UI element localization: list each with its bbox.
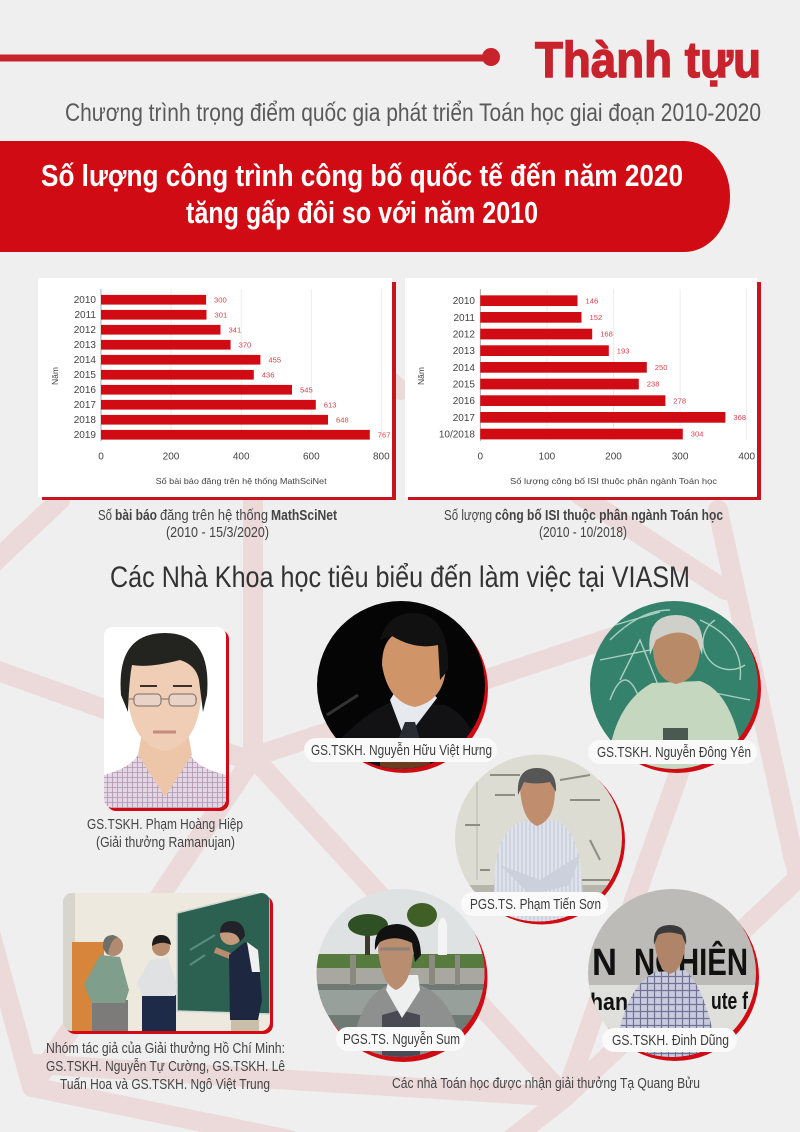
value labels: 301 [214,310,227,320]
year labels: 2013 [74,340,96,351]
value labels [214,296,390,440]
name label: GS.TSKH. Nguyễn Đông Yên [597,744,751,761]
y axis title: Năm [50,367,60,385]
year labels [439,296,475,440]
value labels: 368 [733,413,746,422]
circle portrait: Đinh Dũng: N [592,942,617,984]
name label [304,738,497,762]
caption: MathSciNet chart: Số [98,507,112,524]
year labels: 2010 [74,295,96,306]
value labels: 613 [324,400,336,410]
title: Thành tựu [535,32,761,88]
year labels: 2016 [74,385,96,396]
x axis ticks: 400 [738,452,755,462]
caption: MathSciNet chart: đăng trên hệ thống [160,507,268,524]
caption: ISI chart: (2010 - 10/2018) [539,524,627,541]
x axis ticks [478,452,755,462]
caption: Tạ Quang Bửu prize: Các nhà Toán học được nhận giải thưởng Tạ Quang Bửu [392,1075,700,1092]
value labels: 455 [268,356,281,364]
year labels: 2017 [74,400,96,411]
value labels: 168 [600,330,613,339]
value labels [586,296,746,439]
year labels: 2018 [74,415,96,426]
value labels: 341 [228,326,241,334]
year labels: 2014 [453,363,475,374]
year labels: 10/2018 [439,430,475,440]
header line with dot [0,48,500,66]
caption: Phạm Hoàng Hiệp: (Giải thưởng Ramanujan) [96,834,235,851]
value labels: 146 [586,296,598,305]
value labels: 278 [673,396,686,405]
caption: group photo: Nhóm tác giả của Giải thưởng Hồ Chí Minh: [46,1040,285,1057]
bars [101,295,370,440]
value labels: 304 [691,430,703,439]
circle portrait: Phạm Tiến Sơn [455,754,625,925]
red banner [0,141,730,252]
value labels: 250 [655,363,667,372]
x axis ticks: 0 [478,452,484,462]
value labels: 238 [647,380,659,389]
circle portrait: Nguyễn Hữu Việt Hưng [304,601,497,775]
year labels: 2011 [74,310,96,321]
name label [588,740,757,764]
portrait card: Phạm Hoàng Hiệp [104,627,229,811]
caption: ISI chart: công bố ISI thuộc phân ngành Toán học [495,507,723,524]
x axis ticks: 800 [373,452,390,462]
x axis title: Số lượng công bố ISI thuộc phân ngành Toán học [510,476,718,486]
banner headline line 2: tăng gấp đôi so với năm 2010 [186,195,538,230]
year labels: 2011 [453,313,475,324]
banner headline line 1: Số lượng công trình công bố quốc tế đến năm 2020 [41,158,683,193]
year labels: 2010 [453,296,475,307]
name label: GS.TSKH. Đinh Dũng [612,1032,729,1049]
bars [480,295,725,439]
caption: Phạm Hoàng Hiệp: GS.TSKH. Phạm Hoàng Hiệp [87,816,243,833]
caption: Phạm Hoàng Hiệp [87,816,243,851]
panel: MathSciNet bar chart [38,278,396,500]
name label: GS.TSKH. Nguyễn Hữu Việt Hưng [311,742,492,759]
value labels: 152 [590,313,602,322]
x axis ticks: 300 [672,452,689,462]
circle portrait: Nguyễn Sum [315,889,488,1062]
year labels: 2015 [453,380,475,390]
caption: group photo: GS.TSKH. Nguyễn Tự Cường, GS.TSKH. Lê [46,1058,285,1075]
caption: group photo [46,1040,285,1093]
caption: ISI chart: Số lượng [444,507,492,524]
year labels: 2013 [453,346,475,357]
value labels: 648 [336,416,349,424]
name label: PGS.TS. Phạm Tiến Sơn [470,896,601,913]
circle portrait: Đinh Dũng: ute f [711,988,749,1015]
y axis title: Năm [416,367,426,385]
year labels [74,295,96,441]
circle portrait: Đinh Dũng [588,889,759,1061]
caption: MathSciNet chart: (2010 - 15/3/2020) [166,524,269,541]
year labels: 2014 [74,355,96,366]
value labels: 193 [617,346,629,355]
year labels: 2017 [453,413,475,424]
circle portrait: Đinh Dũng: NGHIÊN [634,940,748,984]
group photo: Hồ Chí Minh prize authors [63,890,273,1034]
circle portrait: Đinh Dũng: han [590,989,628,1016]
value labels: 300 [214,296,227,304]
value labels: 545 [300,386,313,394]
circle portrait: Nguyễn Đông Yên [588,601,761,773]
x axis ticks: 600 [303,452,320,462]
caption: group photo: Tuấn Hoa và GS.TSKH. Ngô Việt Trung [60,1076,270,1093]
caption: MathSciNet chart [98,507,337,541]
x axis ticks: 400 [233,452,250,462]
section heading: Các Nhà Khoa học tiêu biểu đến làm việc tại VIASM [110,561,690,594]
name label [602,1028,737,1052]
panel: ISI bar chart [405,278,761,500]
x axis ticks [98,452,390,462]
name label [336,1027,465,1051]
name label: PGS.TS. Nguyễn Sum [343,1031,460,1048]
x axis ticks: 0 [98,452,104,462]
caption: MathSciNet chart: MathSciNet [271,507,337,524]
x axis title: Số bài báo đăng trên hệ thống MathSciNet [156,476,327,486]
x axis ticks: 200 [163,452,180,462]
x axis ticks: 100 [539,452,556,462]
value labels: 370 [239,340,251,350]
year labels: 2016 [453,396,475,407]
value labels: 767 [378,430,390,440]
caption: MathSciNet chart: bài báo [115,507,157,524]
x axis ticks: 200 [605,452,622,462]
name label [461,892,608,916]
caption: ISI chart [444,507,723,541]
value labels: 436 [262,370,274,380]
year labels: 2012 [453,330,475,340]
year labels: 2015 [74,370,96,381]
background network pattern [0,300,797,1132]
year labels: 2012 [74,325,96,336]
year labels: 2019 [74,430,96,441]
